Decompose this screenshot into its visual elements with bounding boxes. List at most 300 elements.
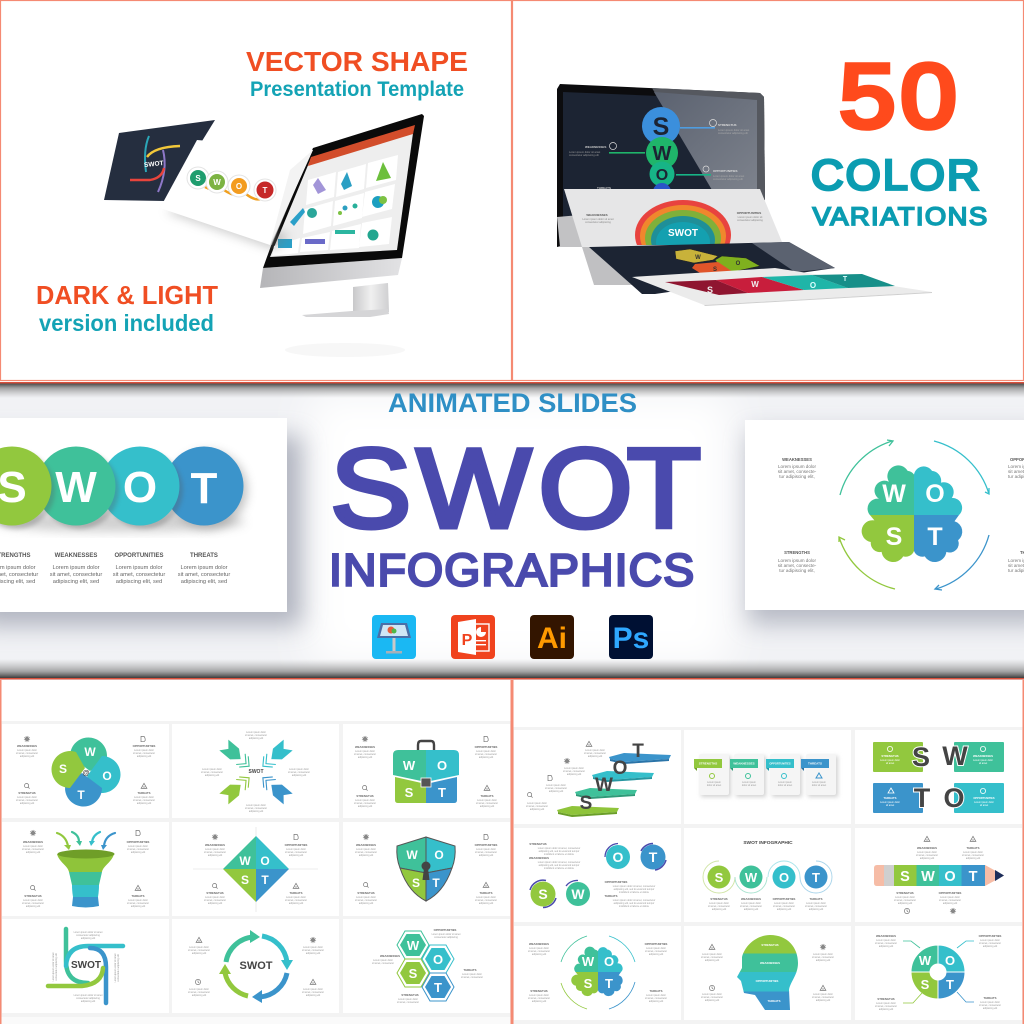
slide: funnel: [2, 822, 169, 916]
text: opportunities: OPPORTUNITIES: [114, 553, 164, 559]
light slide with colored bars: T: [843, 276, 848, 283]
text blocks: STRENGTHS: [24, 894, 42, 898]
ring W: [566, 880, 590, 906]
text: opportunities: [1008, 457, 1024, 479]
text blocks: OPPORTUNITIES: [475, 745, 498, 749]
letters: [919, 953, 955, 992]
text blocks: Lorem ipsum dolor: [246, 804, 266, 807]
text: weaknesses: sit amet, consectetur: [50, 572, 102, 578]
slide: shield: [343, 822, 510, 916]
text blocks: Lorem ipsum dolor: [876, 939, 896, 942]
ring O: O: [613, 849, 624, 865]
text blocks: THREATS: [650, 989, 663, 993]
card weaknesses: Lorem ipsum: [742, 781, 756, 784]
circle T: T: [191, 464, 218, 513]
block weaknesses: WEAKNESSES: [973, 754, 993, 758]
text blocks: adipiscing elit: [983, 945, 998, 948]
text blocks: adipiscing elit: [879, 1008, 894, 1011]
letters: S: [580, 793, 592, 814]
text blocks: sit amet, consectetur: [805, 905, 827, 908]
slide: spiral arrows: [2, 919, 169, 1013]
text blocks: adipiscing elit: [816, 959, 831, 962]
icon: keynote: [372, 615, 416, 659]
text blocks: [528, 942, 668, 1003]
text blocks: adipiscing elit: [208, 902, 223, 905]
light sheet with rings: SWOT: [668, 228, 698, 239]
icon: illustrator: Ai: [537, 622, 567, 655]
text blocks: adipiscing elit: [530, 808, 545, 811]
text blocks: adipiscing elit: [137, 802, 152, 805]
text blocks: sit amet, consectetur: [979, 1004, 1001, 1007]
subheading: version included: version included: [39, 310, 214, 336]
text blocks: Lorem ipsum dolor: [476, 896, 496, 899]
slide: mini brain: [514, 926, 681, 1020]
text blocks: Lorem ipsum dolor: [774, 902, 794, 905]
text blocks: OPPORTUNITIES: [605, 880, 628, 884]
text blocks: sit amet, consectetur: [475, 851, 497, 854]
light sheet with rings: consectetur adipiscing: [737, 218, 763, 222]
hexagon O: [422, 945, 454, 973]
text blocks: adipiscing elit: [898, 902, 913, 905]
hexagon W: [397, 931, 429, 959]
text blocks: sit amet, consectetur: [354, 753, 376, 756]
letters: [406, 848, 444, 890]
text blocks: sit amet, consectetur: [288, 771, 310, 774]
letters: @: [83, 770, 90, 777]
letters: W: [919, 953, 932, 968]
hexagon O: O: [433, 952, 443, 967]
text blocks: sit amet, consectetur: [188, 949, 210, 952]
text blocks: WEAKNESSES: [741, 897, 761, 901]
slide: briefcase: [343, 724, 510, 818]
diamond quadrants: [223, 836, 289, 902]
letters: T: [632, 741, 644, 762]
card threats: THREATS: [808, 762, 822, 766]
card weaknesses: [730, 754, 766, 797]
circle O: O: [779, 870, 789, 885]
text blocks: STRENGTHS: [877, 997, 895, 1001]
card threats: dolor sit amet: [812, 784, 827, 787]
text blocks: sit amet, consectetur: [188, 991, 210, 994]
text blocks: adipiscing elit: [532, 1000, 547, 1003]
text blocks: adipiscing elit: [649, 953, 664, 956]
block opportunities: sit amet: [980, 804, 989, 807]
text blocks: Lorem ipsum dolor: [876, 1002, 896, 1005]
slide: hexagons: [343, 919, 510, 1013]
circle W: [206, 171, 228, 193]
light sheet with rings: WEAKNESSES: [586, 213, 608, 217]
text blocks: sit amet, consectetur: [545, 787, 567, 790]
text blocks: OPPORTUNITIES: [475, 843, 498, 847]
panel: vector shape monitor: [0, 0, 512, 380]
text blocks: adipiscing elit: [705, 999, 720, 1002]
text blocks: sit amet, consectetur: [354, 802, 376, 805]
card: SWOT circles: [0, 418, 287, 612]
text blocks: Lorem ipsum dolor sit amet: [74, 931, 103, 934]
text: opportunities: [113, 553, 165, 585]
text blocks: Lorem ipsum dolor: [128, 899, 148, 902]
heading: dark and light: DARK & LIGHT: [36, 280, 218, 310]
text blocks: STRENGTHS: [206, 891, 224, 895]
block weaknesses: [954, 742, 1004, 772]
text blocks: Lorem ipsum dolor: [702, 993, 722, 996]
text blocks: Lorem ipsum dolor: [564, 767, 584, 770]
text blocks: WEAKNESSES: [917, 846, 937, 850]
text blocks: adipiscing elit: [479, 854, 494, 857]
card strengths: dolor sit amet: [707, 784, 722, 787]
slide: arrows to center: [172, 724, 339, 818]
text blocks: Lorem ipsum dolor: [940, 896, 960, 899]
text blocks: WEAKNESSES: [355, 745, 375, 749]
text blocks: Lorem ipsum dolor: [895, 896, 915, 899]
heading: vector shape: VECTOR SHAPE: [246, 46, 468, 77]
block opportunities: [954, 783, 1004, 813]
text blocks: adipiscing elit: [588, 755, 603, 758]
text blocks: sit amet, consectetur: [701, 996, 723, 999]
text: weaknesses: WEAKNESSES: [782, 457, 812, 462]
text: threats: Lorem ipsum dolor: [180, 565, 228, 571]
text blocks: incididunt ut labore et dolore: [544, 853, 575, 856]
text blocks: sit amet, consectetur: [201, 771, 223, 774]
light slide with colored bars: S: [707, 285, 713, 295]
light sheet with rings: [564, 189, 782, 285]
icon: photoshop: Ps: [613, 622, 649, 655]
text blocks: adipiscing elit: [966, 857, 981, 860]
text blocks: STRENGTHS: [401, 993, 419, 997]
circle O: [650, 162, 674, 186]
text blocks: THREATS: [132, 894, 145, 898]
text blocks: Lorem ipsum dolor: [205, 848, 225, 851]
text: threats: THREATS: [190, 553, 218, 559]
letters: S: [412, 876, 420, 890]
letters: W: [582, 954, 595, 969]
text blocks: Lorem ipsum dolor sit amet: [114, 953, 117, 982]
text blocks: adipiscing elit: [292, 774, 307, 777]
text blocks: STRENGTHS: [529, 842, 547, 846]
slide: circular arrows: [172, 919, 339, 1013]
letters: W: [403, 758, 416, 773]
text blocks: THREATS: [984, 996, 997, 1000]
light slide: [160, 140, 313, 250]
slide title: SWOT INFOGRAPHIC: [743, 840, 793, 846]
text: weaknesses: Lorem ipsum dolor: [778, 464, 816, 469]
text blocks: sit amet, consectetur: [285, 851, 307, 854]
circle O: [228, 175, 250, 197]
block threats: THREATS: [884, 796, 897, 800]
text blocks: adipiscing elit: [358, 756, 373, 759]
circle S: [642, 107, 680, 145]
spiral arrows: [48, 929, 123, 1003]
letters: S: [900, 869, 910, 885]
title: infographics: INFOGRAPHICS: [329, 545, 695, 596]
text blocks: Lorem ipsum dolor: [963, 851, 983, 854]
big letters: T: [914, 783, 931, 813]
subheading: presentation template: Presentation Template: [250, 78, 464, 101]
card strengths: STRENGTHS: [699, 762, 717, 766]
text blocks: sit amet, consectetur: [584, 752, 606, 755]
arrow: strengths: [839, 537, 895, 589]
arrow: opportunities: [934, 441, 989, 494]
letters: T: [77, 788, 85, 802]
heading: variations: VARIATIONS: [812, 202, 989, 231]
connector arrows: [903, 941, 974, 1003]
band labels: [756, 943, 781, 1003]
text: threats: adipiscing elit, sed: [181, 579, 227, 585]
text blocks: [16, 744, 156, 805]
text blocks: WEAKNESSES: [17, 744, 37, 748]
light sheet with rings: OPPORTUNITIES: [737, 211, 761, 215]
panel: animated slides band: [0, 382, 1024, 680]
text blocks: STRENGTHS: [357, 891, 375, 895]
cycle arrows: [561, 936, 635, 1009]
card weaknesses: dolor sit amet: [742, 784, 757, 787]
text blocks: sit amet, consectetur: [916, 854, 938, 857]
letters: [239, 854, 270, 887]
text blocks: consectetur adipiscing: [76, 997, 100, 1000]
slide: diamond: [172, 822, 339, 916]
text blocks: Lorem ipsum dolor: [246, 731, 266, 734]
light sheet with rings: Lorem ipsum dolor sit amet: [582, 217, 614, 221]
text blocks: sit amet, consectetur: [204, 851, 226, 854]
monitor dark screen: consectetur adipiscing elit: [718, 131, 748, 135]
dark slide: SWOT: [144, 160, 164, 169]
block threats: sit amet: [886, 804, 895, 807]
dark slide with hexagons: O: [736, 261, 741, 267]
letters: S: [241, 873, 249, 887]
text blocks: [354, 745, 498, 808]
text blocks: WEAKNESSES: [529, 856, 549, 860]
head bands: [737, 935, 798, 1010]
letters: O: [102, 769, 112, 783]
block strengths: STRENGTHS: [881, 754, 899, 758]
text blocks: sit amet, consectetur: [979, 942, 1001, 945]
text blocks: OPPORTUNITIES: [939, 891, 962, 895]
text blocks: Lorem ipsum dolor: [23, 899, 43, 902]
text blocks: incididunt ut labore et dolore: [619, 891, 650, 894]
dark slide: [104, 120, 215, 201]
text blocks: sit amet, consectetur: [740, 905, 762, 908]
ring S: S: [538, 886, 548, 902]
text blocks: sit amet, consectetur: [127, 848, 149, 851]
text blocks: OPPORTUNITIES: [979, 934, 1002, 938]
text blocks: Lorem ipsum dolor: [527, 802, 547, 805]
briefcase handle: [418, 741, 434, 750]
letters: W: [921, 869, 935, 885]
text blocks: sit amet, consectetur: [645, 997, 667, 1000]
light sheet with rings: Lorem ipsum dolor sit: [738, 215, 763, 219]
letters: S: [59, 762, 67, 776]
letters: W: [595, 775, 613, 796]
text: weaknesses: Lorem ipsum dolor: [52, 565, 100, 571]
letters: [59, 745, 112, 802]
text blocks: adipiscing elit, sed do eiusmod tempor: [539, 850, 580, 853]
circle W: W: [213, 178, 221, 187]
letters: S: [584, 976, 593, 991]
letters: S: [405, 785, 414, 800]
text blocks: [894, 846, 984, 905]
text blocks: sit amet, consectetur: [372, 962, 394, 965]
text blocks: WEAKNESSES: [529, 942, 549, 946]
text blocks: Lorem ipsum dolor: [303, 988, 323, 991]
text: weaknesses: sit amet, consecte-: [778, 469, 817, 474]
text blocks: sit amet, consectetur: [962, 854, 984, 857]
label swot: SWOT: [248, 769, 264, 775]
text blocks: Lorem ipsum dolor: [646, 947, 666, 950]
hexagon T: [422, 973, 454, 1001]
card opportunities: Lorem ipsum: [778, 781, 792, 784]
block weaknesses: Lorem ipsum dolor: [973, 759, 993, 762]
circle O: O: [656, 167, 668, 184]
text blocks: sit amet, consectetur: [397, 1001, 419, 1004]
brain letters: W: [882, 480, 906, 508]
letters: O: [260, 854, 270, 868]
text blocks: adipiscing elit: [920, 857, 935, 860]
text blocks: sit amet, consectetur: [245, 807, 267, 810]
text blocks: adipiscing elit: [705, 959, 720, 962]
text blocks: adipiscing elit: [131, 851, 146, 854]
text blocks: sit amet, consectetur: [302, 949, 324, 952]
text blocks: adipiscing elit: [208, 854, 223, 857]
big letters: S: [912, 742, 930, 772]
letters: T: [605, 976, 613, 991]
text blocks: OPPORTUNITIES: [285, 843, 308, 847]
text blocks: sit amet, consectetur: [528, 950, 550, 953]
icon: powerpoint: P: [462, 632, 473, 649]
text blocks: [52, 931, 120, 1003]
circular arrows: [219, 930, 293, 1003]
text blocks: sit amet, consectetur: [645, 950, 667, 953]
text blocks: Lorem ipsum dolor: [585, 749, 605, 752]
letters: O: [613, 758, 627, 779]
text blocks: sit amet, consectetur: [939, 899, 961, 902]
circle O: [768, 861, 800, 888]
text blocks: Lorem ipsum dolor: [202, 768, 222, 771]
hexagon W: W: [407, 938, 420, 953]
panel: slide grid right: [512, 680, 1024, 1024]
text blocks: adipiscing elit: [20, 802, 35, 805]
monitor dark screen: Lorem ipsum dolor sit amet: [569, 150, 601, 154]
brain shape: [862, 465, 962, 562]
text blocks: sit amet, consectetur: [476, 802, 498, 805]
text blocks: adipiscing elit: [249, 737, 264, 740]
text blocks: sit amet, consectetur: [127, 902, 149, 905]
dark slide with hexagons: W: [695, 255, 701, 261]
text blocks: Lorem ipsum dolor: [356, 896, 376, 899]
icon: illustrator: [530, 615, 574, 659]
slide: stairs: [514, 730, 681, 824]
text: strengths: Lorem ipsum dolor: [778, 558, 816, 563]
text blocks: adipiscing elit: [289, 902, 304, 905]
text blocks: THREATS: [810, 897, 823, 901]
letters: O: [434, 848, 444, 862]
heading: 50: 50: [839, 47, 957, 147]
text blocks: [529, 842, 655, 908]
text blocks: Lorem ipsum dolor: [189, 946, 209, 949]
block strengths: [873, 742, 923, 772]
text blocks: adipiscing elit: [649, 1000, 664, 1003]
text: strengths: tur adipiscing elit,: [779, 568, 815, 573]
text blocks: STRENGTHS: [18, 791, 36, 795]
letters: T: [946, 977, 954, 992]
text blocks: sit amet, consectetur: [133, 752, 155, 755]
text blocks: adipiscing elit: [358, 805, 373, 808]
text blocks: OPPORTUNITIES: [434, 928, 457, 932]
ring S: [530, 880, 556, 908]
slide: head: [684, 926, 851, 1020]
text blocks: adipiscing elit: [289, 854, 304, 857]
text blocks: sit amet, consectetur: [16, 799, 38, 802]
circle W: [646, 137, 678, 169]
letters: [900, 869, 978, 885]
text blocks: adipiscing elit: [359, 854, 374, 857]
text blocks: adipiscing elit: [20, 755, 35, 758]
ring O: [605, 844, 630, 869]
slide: pencil: [855, 828, 1022, 922]
text blocks: sit amet, consectetur: [812, 956, 834, 959]
big letters: W: [942, 741, 968, 771]
card opportunities: [766, 754, 802, 797]
text blocks: adipiscing elit: [306, 994, 321, 997]
text blocks: adipiscing elit: [81, 1000, 96, 1003]
monitor dark screen: consectetur adipiscing elit: [569, 153, 599, 157]
text blocks: Lorem ipsum dolor: [980, 1001, 1000, 1004]
circle S: [187, 167, 209, 189]
circle T: [800, 861, 832, 893]
text blocks: Lorem ipsum dolor sit amet: [74, 994, 103, 997]
card strengths: [694, 754, 731, 797]
text blocks: sit amet, consectetur: [16, 752, 38, 755]
text blocks: STRENGTHS: [356, 794, 374, 798]
card opportunities: dolor sit amet: [778, 784, 793, 787]
text blocks: Lorem ipsum dolor: [355, 799, 375, 802]
monitor dark screen: [557, 84, 765, 247]
text blocks: [204, 843, 308, 905]
letters: O: [944, 869, 956, 885]
card threats: [801, 754, 838, 797]
letters: W: [406, 848, 418, 862]
slide: ribbon cards: [684, 730, 851, 824]
text blocks: Lorem ipsum dolor: [546, 784, 566, 787]
text: strengths: sit amet, consecte-: [778, 563, 817, 568]
circle W: [735, 866, 767, 893]
text blocks: [875, 934, 1002, 1011]
text blocks: sit amet, consectetur: [563, 770, 585, 773]
text blocks: consectetur adipiscing: [76, 934, 100, 937]
text blocks: adipiscing elit: [816, 999, 831, 1002]
text blocks: [372, 928, 483, 1004]
text blocks: sit amet, consectetur: [701, 956, 723, 959]
text: strengths: [0, 553, 38, 585]
text blocks: adipiscing elit: [809, 908, 824, 911]
text blocks: sit amet, consectetur: [302, 991, 324, 994]
light slide with colored bars: [632, 268, 932, 306]
text: weaknesses: tur adipiscing elit,: [779, 474, 815, 479]
circle T: [254, 179, 276, 201]
text blocks: incididunt ut labore et dolore: [544, 867, 575, 870]
text blocks: Lorem ipsum dolor sit amet, consectetur: [538, 847, 580, 850]
band labels: WEAKNESSES: [760, 961, 780, 965]
circle O: [100, 446, 180, 526]
dark slide with hexagons: [589, 242, 835, 294]
text blocks: sit amet, consectetur: [475, 899, 497, 902]
text blocks: sit amet, consectetur: [773, 905, 795, 908]
text: strengths: STRENGTHS: [784, 550, 810, 555]
text blocks: Lorem ipsum dolor: [813, 953, 833, 956]
text blocks: Lorem ipsum dolor: [17, 749, 37, 752]
circle S: S: [195, 174, 201, 183]
text blocks: sit amet, consectetur: [355, 899, 377, 902]
text blocks: Lorem ipsum dolor: [806, 902, 826, 905]
